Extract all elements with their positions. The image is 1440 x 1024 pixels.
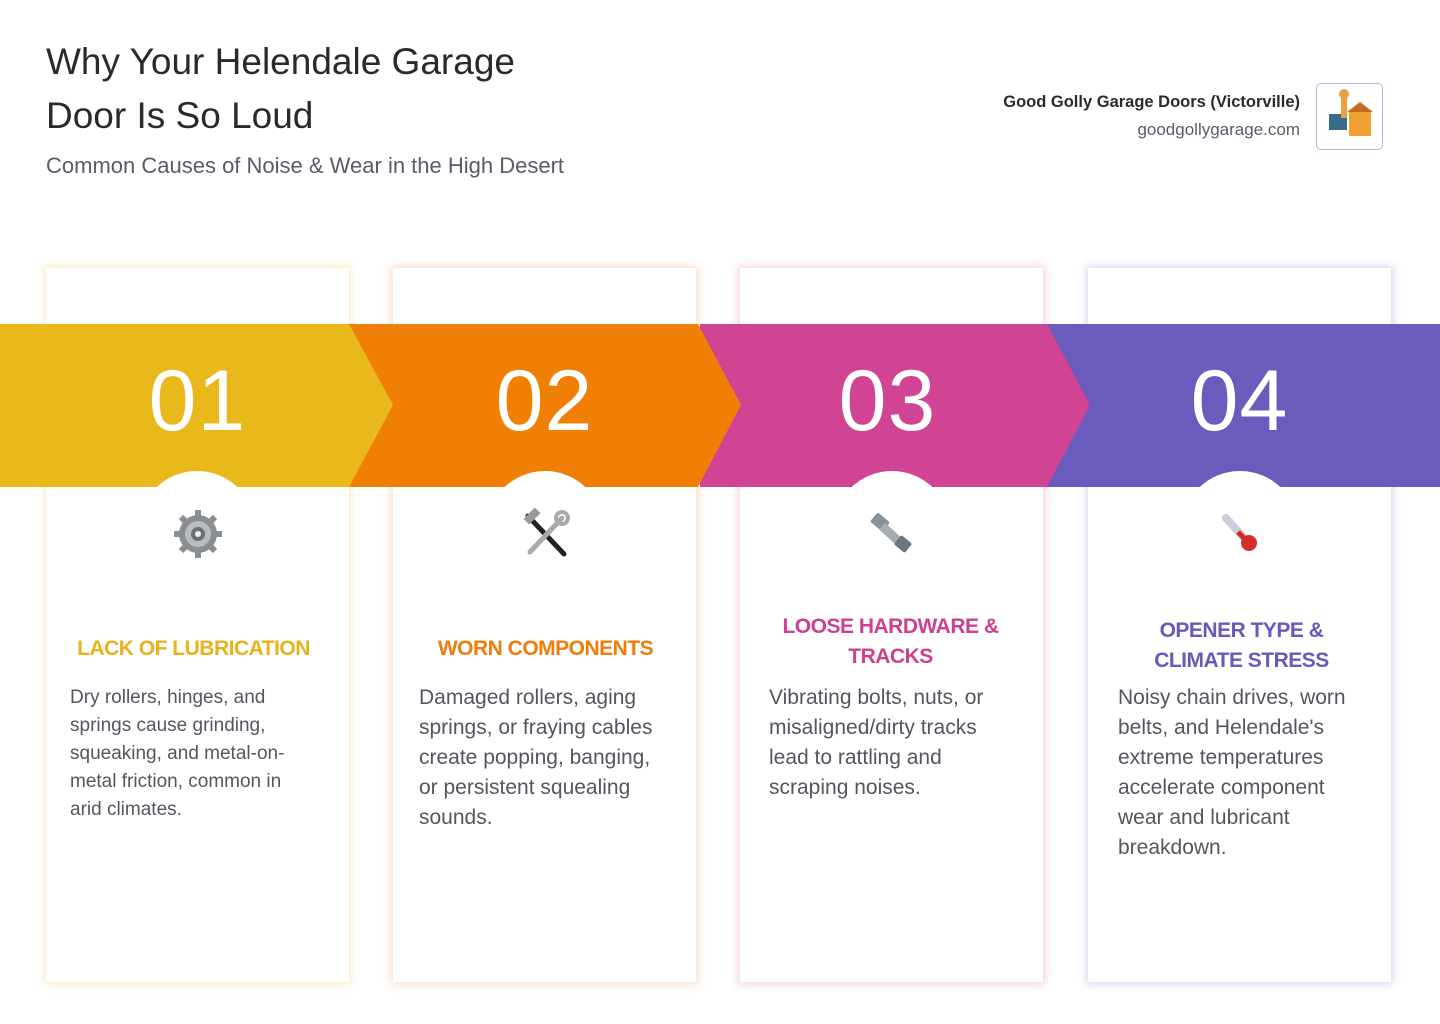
subtitle: Common Causes of Noise & Wear in the High Desert <box>46 153 564 178</box>
number 03: 03 <box>839 353 936 449</box>
card 3 <box>740 268 1043 982</box>
heading 3: TRACKS <box>848 645 933 668</box>
card 1 <box>46 268 349 982</box>
brand name: Good Golly Garage Doors (Victorville) <box>1003 93 1300 111</box>
brand url: goodgollygarage.com <box>1137 120 1300 139</box>
number 02: 02 <box>496 353 593 449</box>
arrow 4 <box>1047 324 1440 487</box>
brand block <box>1003 83 1383 150</box>
arrow band <box>0 324 1440 487</box>
body 1: Dry rollers, hinges, and springs cause grinding, squeaking, and metal-on-metal friction, common in arid climates. <box>70 687 284 820</box>
arrow 2 <box>349 324 741 487</box>
heading 3 <box>782 615 998 668</box>
heading 2: WORN COMPONENTS <box>438 637 653 660</box>
arrow 1 <box>0 324 393 487</box>
icon: thermometer <box>1222 514 1257 551</box>
body 3: Vibrating bolts, nuts, or misaligned/dirty tracks lead to rattling and scraping noises. <box>769 686 983 799</box>
heading 4: CLIMATE STRESS <box>1154 649 1329 672</box>
card 4 <box>1088 268 1391 982</box>
circles <box>138 471 256 589</box>
title: Why Your Helendale Garage <box>46 41 515 82</box>
logo <box>1316 83 1383 150</box>
heading 4: OPENER TYPE & <box>1160 619 1323 642</box>
number 01: 01 <box>149 353 246 449</box>
icon: bolt <box>870 513 912 552</box>
heading 1: LACK OF LUBRICATION <box>77 637 310 660</box>
arrow 3 <box>700 324 1090 487</box>
body 2: Damaged rollers, aging springs, or fraying cables create popping, banging, or persistent squealing sounds. <box>419 686 652 829</box>
card 2 <box>393 268 696 982</box>
heading 3: LOOSE HARDWARE & <box>782 615 998 638</box>
heading 4 <box>1154 619 1329 672</box>
icon: gear <box>174 510 222 558</box>
body 4: Noisy chain drives, worn belts, and Helendale's extreme temperatures accelerate component wear and lubricant breakdown. <box>1118 686 1346 859</box>
title <box>46 41 515 136</box>
icon: hammer and wrench <box>524 508 570 556</box>
title: Door Is So Loud <box>46 95 313 136</box>
number 04: 04 <box>1191 353 1288 449</box>
